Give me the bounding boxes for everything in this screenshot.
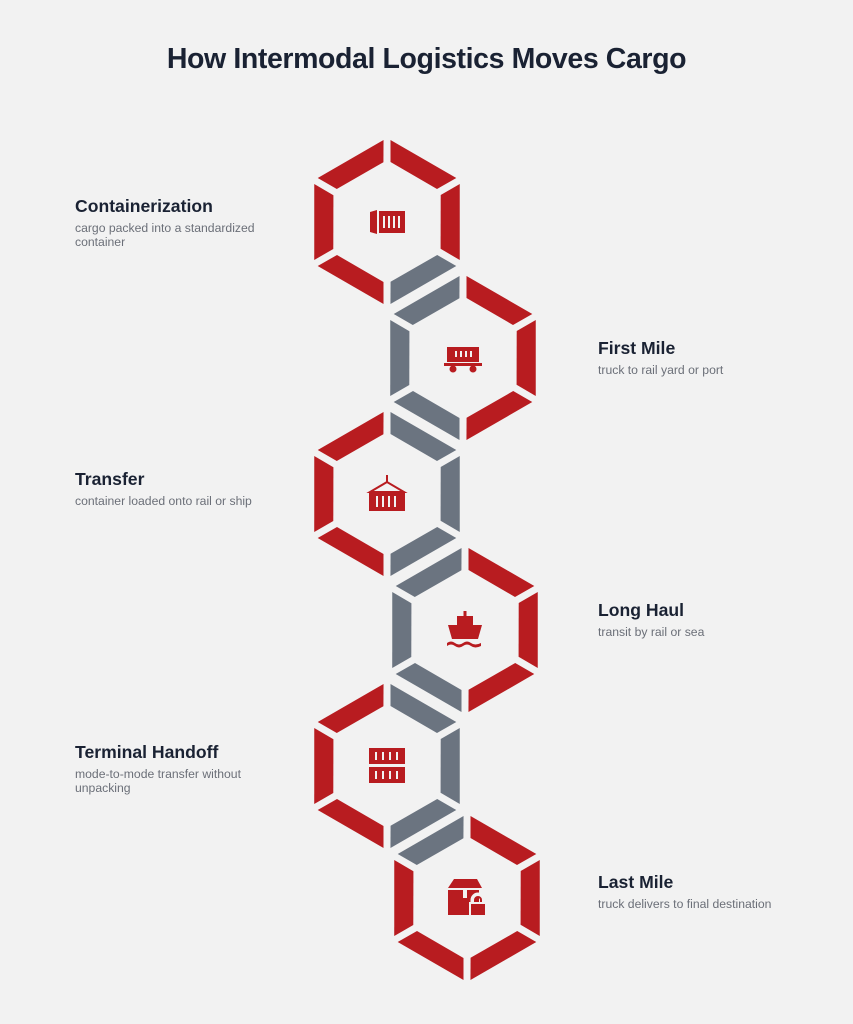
hex 4: long haul	[359, 529, 571, 731]
label: containerization	[75, 196, 255, 249]
icon: ship	[447, 611, 482, 648]
label: terminal handoff: mode-to-mode transfer without unpacking	[75, 767, 241, 795]
label: last mile	[598, 872, 771, 911]
icon: stacked containers	[369, 748, 405, 783]
hex 5: terminal handoff	[281, 665, 493, 867]
label: first mile: truck to rail yard or port	[598, 363, 723, 377]
icon: container	[370, 210, 405, 234]
label: last mile: Last Mile	[598, 872, 673, 892]
hex 2: first mile	[357, 257, 569, 459]
icon: crane container	[369, 475, 405, 511]
label: long haul	[598, 600, 704, 639]
icon: package with lock	[448, 879, 486, 916]
label: long haul: transit by rail or sea	[598, 625, 704, 639]
label: containerization: Containerization	[75, 196, 213, 216]
label: transfer: Transfer	[75, 469, 144, 489]
label: first mile: First Mile	[598, 338, 675, 358]
hex 3: transfer	[281, 393, 493, 595]
label: first mile	[598, 338, 724, 377]
label: last mile: truck delivers to final destination	[598, 897, 771, 911]
label: long haul: Long Haul	[598, 600, 684, 620]
hex 6: last mile	[361, 797, 573, 999]
title: How Intermodal Logistics Moves Cargo	[167, 43, 686, 75]
icon: rail car	[444, 347, 482, 372]
hex 1: containerization	[281, 121, 493, 323]
label: containerization: cargo packed into a standardized container	[75, 221, 255, 249]
label: terminal handoff	[75, 742, 241, 795]
label: terminal handoff: Terminal Handoff	[75, 742, 218, 762]
label: transfer: container loaded onto rail or ship	[75, 494, 252, 508]
label: transfer	[75, 469, 252, 508]
